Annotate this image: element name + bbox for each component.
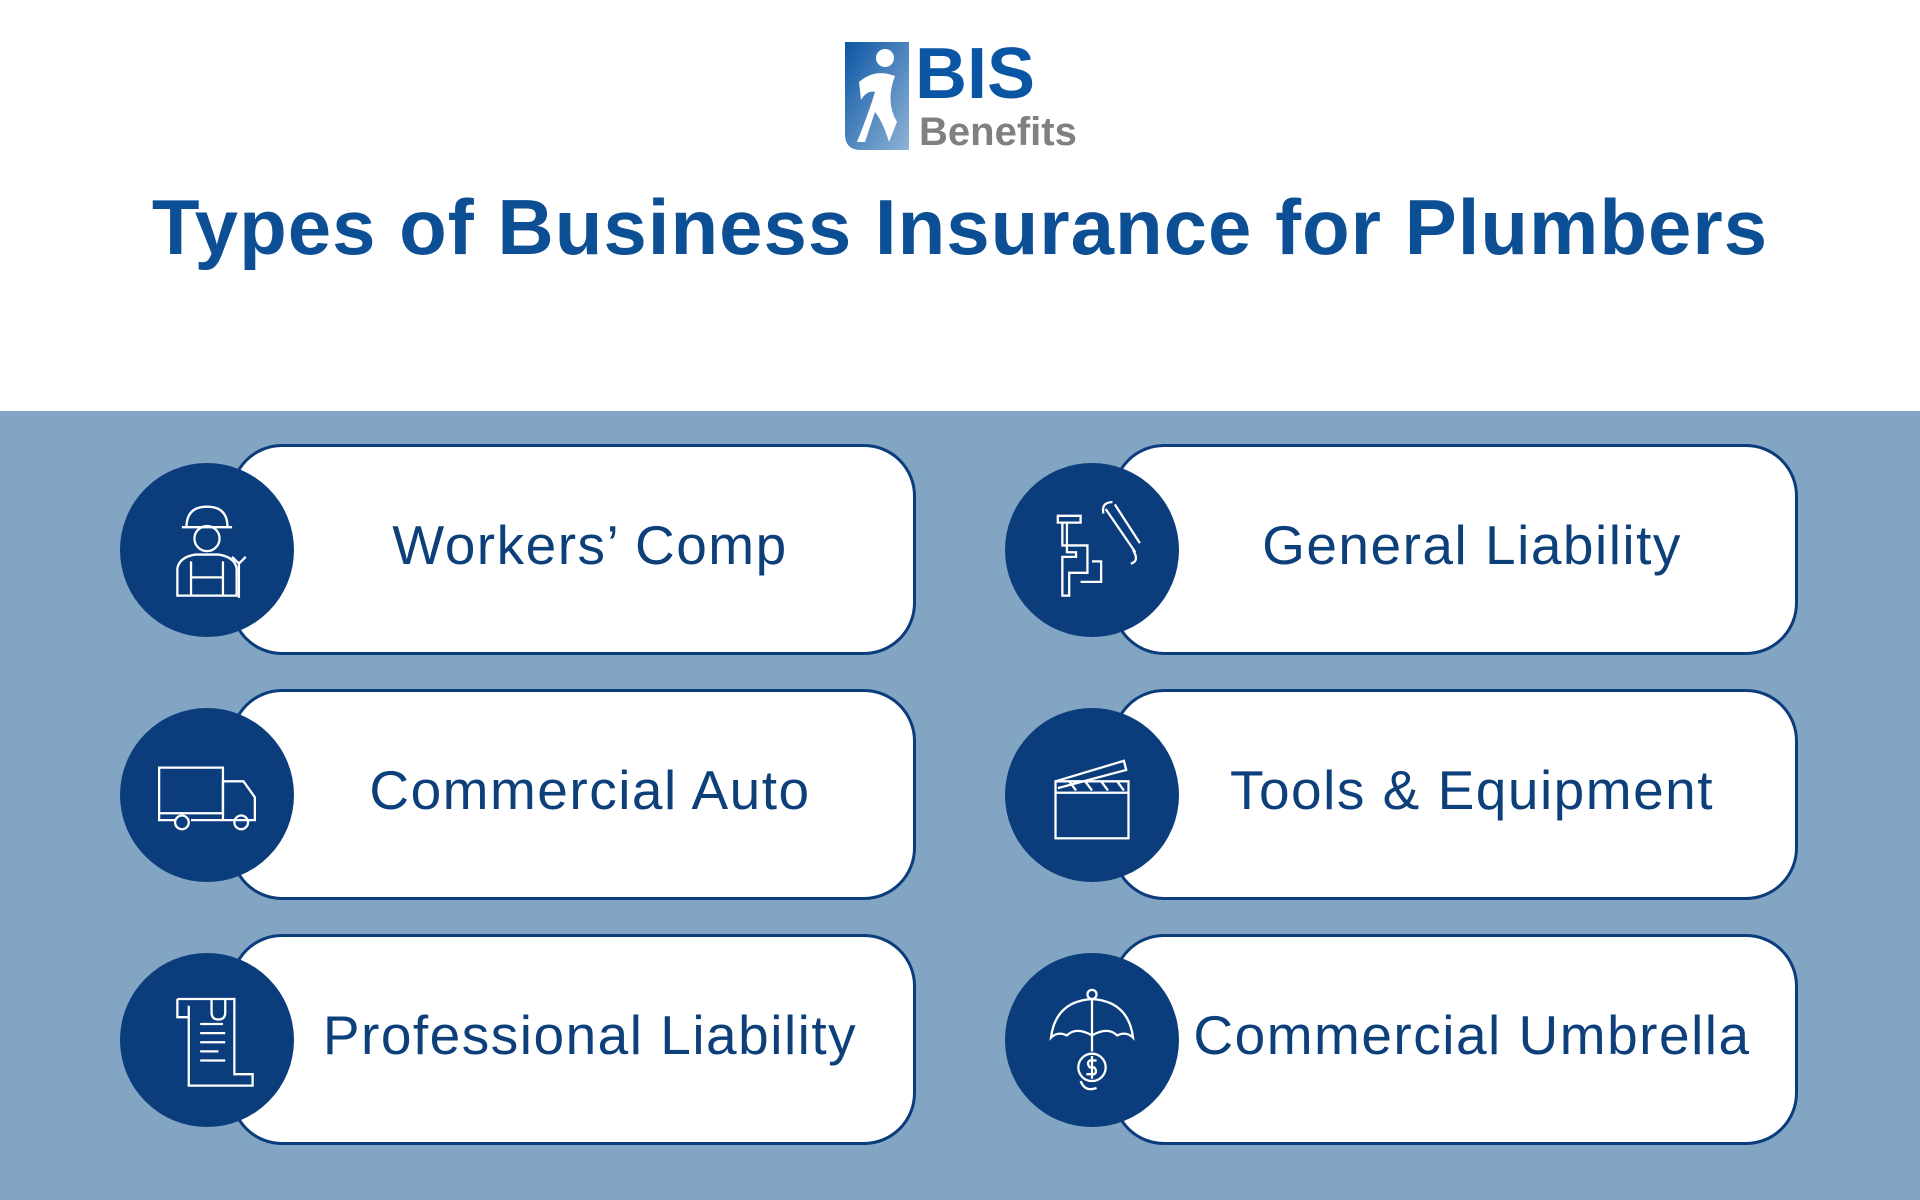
card: Professional Liability: Professional Liability (323, 1004, 857, 1066)
icon: document scroll (120, 953, 294, 1127)
icon: clapperboard (1005, 708, 1179, 882)
icon: pipes and wrench (1005, 463, 1179, 637)
card: Commercial Umbrella: Commercial Umbrella (1193, 1004, 1751, 1066)
title: Types of Business Insurance for Plumbers (152, 183, 1768, 271)
card: Professional Liability (230, 934, 916, 1145)
card: General Liability (1112, 444, 1798, 655)
card: Commercial Umbrella (1112, 934, 1798, 1145)
card: Workers' Comp (230, 444, 916, 655)
icon: umbrella with dollar (1005, 953, 1179, 1127)
card: Commercial Auto (230, 689, 916, 900)
card: General Liability: General Liability (1262, 514, 1682, 576)
logo text Benefits: Benefits (919, 110, 1077, 154)
logo text BIS: BIS (915, 34, 1035, 114)
background band (0, 411, 1920, 1200)
logo (845, 34, 1077, 154)
card: Commercial Auto: Commercial Auto (369, 758, 811, 820)
icon: logo emblem (845, 42, 909, 150)
card: Workers' Comp: Workers’ Comp (392, 514, 788, 576)
icon: worker (120, 463, 294, 637)
card: Tools & Equipment (1112, 689, 1798, 900)
card: Tools & Equipment: Tools & Equipment (1230, 758, 1714, 820)
icon: truck (120, 708, 294, 882)
